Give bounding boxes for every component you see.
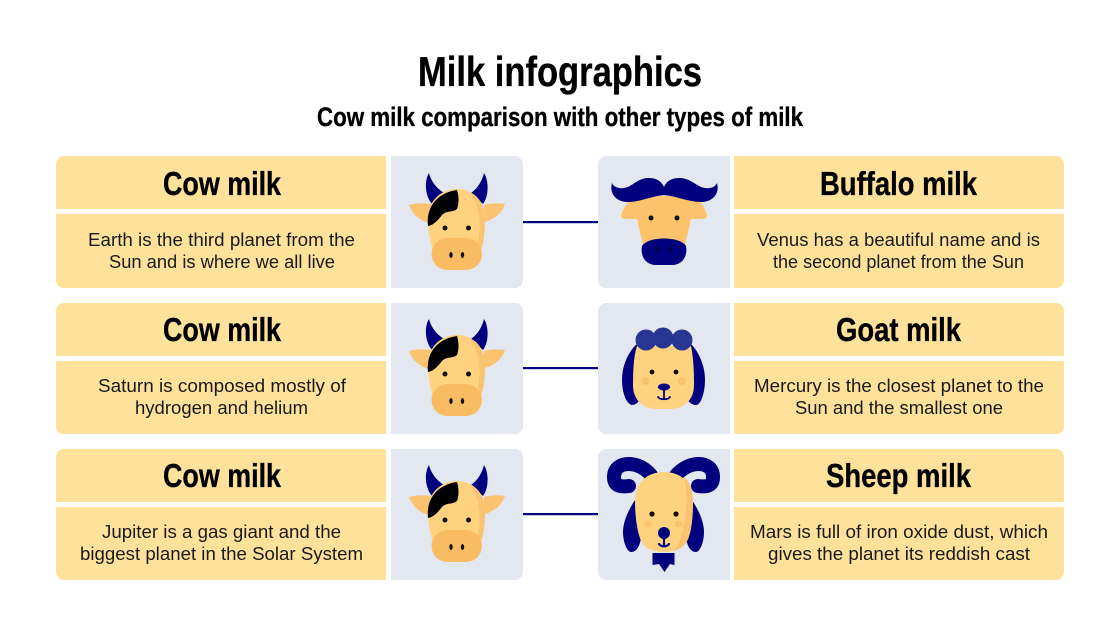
text block: jupiter xyxy=(56,507,386,580)
heading: sheep milk: Sheep milk xyxy=(826,457,972,494)
text block: mercury: Sun and the smallest one xyxy=(795,398,1003,418)
heading: cow milk 3: Cow milk xyxy=(163,457,282,494)
text block: venus: Venus has a beautiful name and is xyxy=(757,230,1040,250)
text block: mercury xyxy=(734,361,1064,434)
heading: buffalo milk: Buffalo milk xyxy=(820,165,978,202)
icon: goat xyxy=(598,303,730,434)
panel: buffalo milk xyxy=(598,156,1064,288)
text block: mars: Mars is full of iron oxide dust, which xyxy=(750,522,1048,542)
text block: mercury: Mercury is the closest planet to the xyxy=(754,376,1044,396)
text block: venus xyxy=(734,214,1064,288)
icon: cow 2 xyxy=(391,303,523,434)
text block: jupiter: Jupiter is a gas giant and the xyxy=(102,522,341,542)
icon: cow 1 xyxy=(391,156,523,288)
heading: goat milk xyxy=(734,303,1064,356)
connector 3 xyxy=(523,513,598,515)
heading: cow milk 2 xyxy=(56,303,386,356)
panel: goat milk xyxy=(598,303,1064,434)
heading: buffalo milk xyxy=(734,156,1064,209)
text block: saturn: hydrogen and helium xyxy=(135,398,308,418)
text block: mars: gives the planet its reddish cast xyxy=(768,544,1030,564)
heading: goat milk: Goat milk xyxy=(836,311,962,348)
icon: buffalo xyxy=(598,156,730,288)
text block: earth xyxy=(56,214,386,288)
heading: sheep milk xyxy=(734,449,1064,502)
icon: sheep xyxy=(598,449,730,580)
text block: saturn: Saturn is composed mostly of xyxy=(98,376,347,396)
heading: cow milk 1: Cow milk xyxy=(163,165,282,202)
heading: cow milk 3 xyxy=(56,449,386,502)
text block: mars xyxy=(734,507,1064,580)
text block: saturn xyxy=(56,361,386,434)
text block: earth: Sun and is where we all live xyxy=(109,252,335,272)
title: Milk infographics xyxy=(418,48,702,95)
panel: cow milk row 1 xyxy=(56,156,523,288)
text block: venus: the second planet from the Sun xyxy=(773,252,1024,272)
text block: jupiter: biggest planet in the Solar System xyxy=(80,544,363,564)
heading: cow milk 1 xyxy=(56,156,386,209)
panel: cow milk row 3 xyxy=(56,449,523,580)
connector 2 xyxy=(523,367,598,369)
panel: sheep milk xyxy=(598,449,1064,580)
connector 1 xyxy=(523,221,598,223)
heading: cow milk 2: Cow milk xyxy=(163,311,282,348)
subtitle: Cow milk comparison with other types of milk xyxy=(317,102,804,132)
icon: cow 3 xyxy=(391,449,523,580)
text block: earth: Earth is the third planet from the xyxy=(88,230,355,250)
panel: cow milk row 2 xyxy=(56,303,523,434)
